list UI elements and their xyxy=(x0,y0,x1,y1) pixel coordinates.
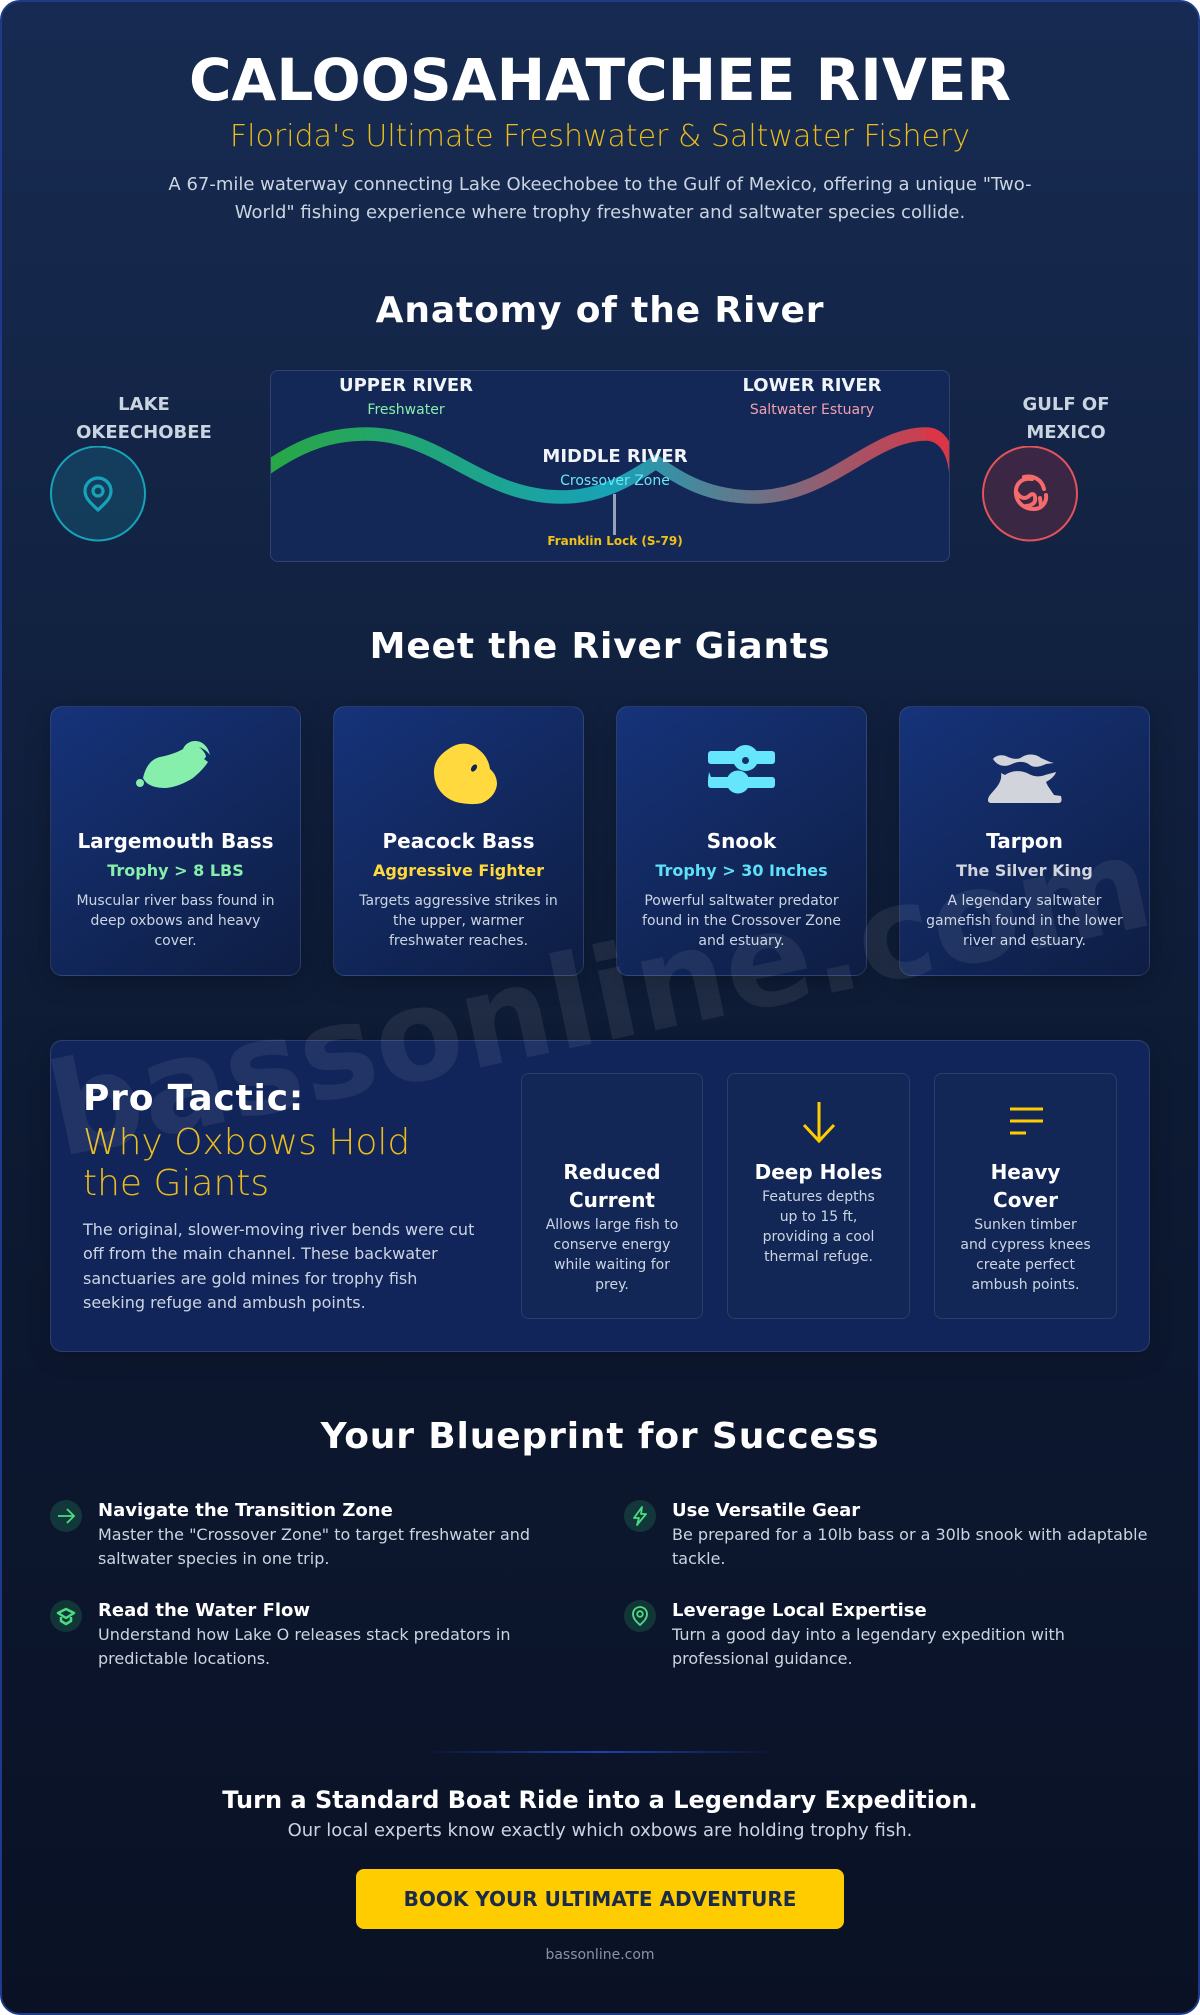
title: Deep Holes xyxy=(755,1160,882,1184)
button: book: BOOK YOUR ULTIMATE ADVENTURE xyxy=(404,1887,796,1911)
card: heavy cover xyxy=(934,1073,1117,1319)
marker: lock line xyxy=(613,494,616,535)
panel: river map xyxy=(270,370,950,562)
title: Use Versatile Gear xyxy=(672,1500,860,1521)
icon: cap xyxy=(50,1600,82,1632)
description: ambush points. xyxy=(971,1277,1080,1293)
description xyxy=(76,893,275,949)
description: Be prepared for a 10lb bass or a 30lb snook with adaptable xyxy=(672,1525,1147,1544)
card: tarpon xyxy=(899,706,1150,976)
button: book xyxy=(356,1869,844,1929)
label: middle river: MIDDLE RIVER xyxy=(542,446,688,467)
description: the upper, warmer xyxy=(393,913,524,929)
footer url: bassonline.com xyxy=(545,1947,655,1963)
name: Snook xyxy=(707,829,776,853)
label: upper river: UPPER RIVER xyxy=(339,375,473,396)
label: saltwater estuary: Saltwater Estuary xyxy=(750,402,874,418)
icon: bolt xyxy=(624,1500,656,1532)
watermark: bassonline.com xyxy=(36,808,1164,1187)
description: A legendary saltwater xyxy=(948,893,1102,909)
icon: lake pin xyxy=(50,446,146,542)
description: deep oxbows and heavy xyxy=(91,913,260,929)
name: Largemouth Bass xyxy=(77,829,274,853)
subheading: oxbows: the Giants xyxy=(83,1162,269,1204)
name: Tarpon xyxy=(986,829,1063,853)
icon: arrow xyxy=(50,1500,82,1532)
description xyxy=(98,1625,511,1668)
title xyxy=(991,1160,1060,1212)
label: crossover zone: Crossover Zone xyxy=(560,473,670,489)
title: Reduced xyxy=(563,1160,661,1184)
description: freshwater reaches. xyxy=(389,933,528,949)
icon: snook xyxy=(708,745,775,794)
label: gulf of mexico: GULF OF xyxy=(1022,394,1110,415)
description: Master the "Crossover Zone" to target freshwater and xyxy=(98,1525,530,1544)
description xyxy=(642,893,841,949)
name: Peacock Bass xyxy=(382,829,534,853)
description: found in the Crossover Zone xyxy=(642,913,841,929)
description: create perfect xyxy=(976,1257,1075,1273)
trophy: Trophy > 30 Inches xyxy=(655,861,828,880)
item: water flow xyxy=(50,1600,511,1668)
intro text: A 67-mile waterway connecting Lake Okeechobee to the Gulf of Mexico, offering a unique "Two- xyxy=(168,174,1032,195)
description xyxy=(546,1217,678,1293)
label: lake okeechobee: OKEECHOBEE xyxy=(76,422,212,443)
subheading: oxbows xyxy=(83,1122,410,1204)
label: lake okeechobee xyxy=(76,394,212,443)
subheading: oxbows: Why Oxbows Hold xyxy=(83,1122,410,1163)
title: Navigate the Transition Zone xyxy=(98,1500,393,1521)
label: franklin lock: Franklin Lock (S-79) xyxy=(547,534,683,548)
description xyxy=(960,1217,1091,1293)
intro text xyxy=(168,174,1032,223)
cta heading: Turn a Standard Boat Ride into a Legendary Expedition. xyxy=(222,1786,978,1814)
description: Powerful saltwater predator xyxy=(644,893,839,909)
description: The original, slower-moving river bends were cut xyxy=(83,1220,474,1239)
trophy: Trophy > 8 LBS xyxy=(107,861,244,880)
description xyxy=(672,1525,1147,1568)
trait: Aggressive Fighter xyxy=(373,861,544,880)
description: prey. xyxy=(595,1277,629,1293)
item: local expertise xyxy=(624,1600,1065,1668)
card: largemouth bass xyxy=(50,706,301,976)
card: snook xyxy=(616,706,867,976)
divider: footer xyxy=(420,1751,780,1753)
description: providing a cool xyxy=(763,1229,874,1245)
card: deep holes xyxy=(727,1073,910,1319)
description: Turn a good day into a legendary expedition with xyxy=(672,1625,1065,1644)
description: off from the main channel. These backwater xyxy=(83,1244,438,1263)
item: transition zone xyxy=(50,1500,530,1568)
description: while waiting for xyxy=(554,1257,670,1273)
label: lower river: LOWER RIVER xyxy=(742,375,882,396)
title: Read the Water Flow xyxy=(98,1600,310,1621)
description: seeking refuge and ambush points. xyxy=(83,1293,366,1312)
item: versatile gear xyxy=(624,1500,1147,1568)
description: river and estuary. xyxy=(963,933,1086,949)
description xyxy=(672,1625,1065,1668)
description xyxy=(82,1220,474,1312)
description: Allows large fish to xyxy=(546,1217,678,1233)
icon: pin xyxy=(624,1600,656,1632)
title: Current xyxy=(569,1188,655,1212)
description xyxy=(359,893,558,949)
label: freshwater: Freshwater xyxy=(367,402,445,418)
icon: tarpon xyxy=(988,754,1062,803)
label: gulf of mexico: MEXICO xyxy=(1026,422,1106,443)
cta subtext: Our local experts know exactly which oxbows are holding trophy fish. xyxy=(288,1820,912,1841)
description: and estuary. xyxy=(698,933,785,949)
description: and cypress knees xyxy=(960,1237,1091,1253)
description: Understand how Lake O releases stack predators in xyxy=(98,1625,511,1644)
label: lake okeechobee: LAKE xyxy=(118,394,170,415)
description: sanctuaries are gold mines for trophy fish xyxy=(83,1269,417,1288)
card: peacock bass xyxy=(333,706,584,976)
description: gamefish found in the lower xyxy=(926,913,1123,929)
icon: down arrow xyxy=(803,1102,835,1144)
subtitle: Florida's Ultimate Freshwater & Saltwater Fishery xyxy=(230,119,970,154)
heading: giants: Meet the River Giants xyxy=(370,626,830,667)
river path xyxy=(271,427,949,504)
title xyxy=(563,1160,661,1212)
description: professional guidance. xyxy=(672,1649,853,1668)
label: gulf of mexico xyxy=(1022,394,1110,443)
description xyxy=(98,1525,530,1568)
heading: anatomy: Anatomy of the River xyxy=(376,290,824,331)
description: Sunken timber xyxy=(974,1217,1077,1233)
description: tackle. xyxy=(672,1549,726,1568)
intro text: World" fishing experience where trophy freshwater and saltwater species collide. xyxy=(235,202,965,223)
description: saltwater species in one trip. xyxy=(98,1549,329,1568)
description xyxy=(926,893,1123,949)
description: cover. xyxy=(154,933,197,949)
nickname: The Silver King xyxy=(956,861,1093,880)
description: predictable locations. xyxy=(98,1649,270,1668)
title: CALOOSAHATCHEE RIVER xyxy=(189,46,1011,114)
description: Features depths xyxy=(762,1189,875,1205)
card: reduced current xyxy=(521,1073,703,1319)
heading: pro tactic: Pro Tactic: xyxy=(83,1078,304,1119)
icon: peacock bass xyxy=(434,744,497,804)
description: up to 15 ft, xyxy=(780,1209,857,1225)
description: Muscular river bass found in xyxy=(76,893,275,909)
description xyxy=(762,1189,875,1265)
icon: bass xyxy=(136,741,210,788)
title: Leverage Local Expertise xyxy=(672,1600,927,1621)
title: Heavy xyxy=(991,1160,1060,1184)
heading: blueprint: Your Blueprint for Success xyxy=(321,1416,879,1457)
panel: pro tactic xyxy=(50,1040,1150,1352)
description: conserve energy xyxy=(554,1237,670,1253)
icon: gulf swirl xyxy=(982,446,1078,542)
title: Cover xyxy=(993,1188,1058,1212)
description: thermal refuge. xyxy=(764,1249,873,1265)
description: Targets aggressive strikes in xyxy=(359,893,558,909)
icon: lines xyxy=(1010,1108,1043,1134)
